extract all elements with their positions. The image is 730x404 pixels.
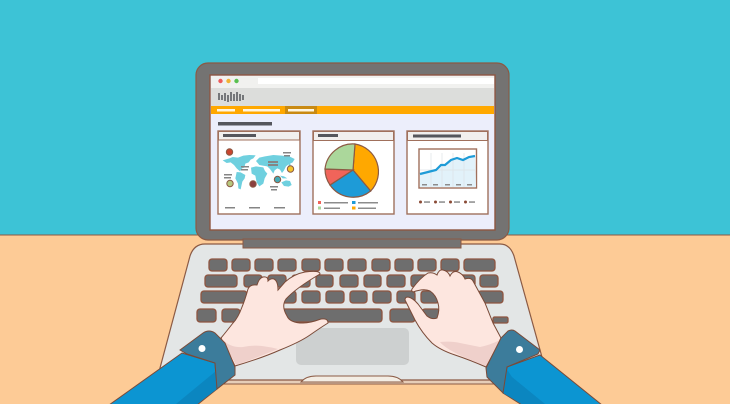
front notch [301, 376, 403, 382]
key row 3 [201, 291, 503, 303]
toolbar [211, 88, 494, 106]
left cuff button [198, 345, 206, 352]
hinge [243, 239, 461, 248]
nav item 1 [217, 109, 235, 112]
base deck [160, 244, 545, 380]
right wrist shadow [440, 340, 500, 366]
world map continents [223, 155, 295, 189]
window dots [218, 79, 239, 83]
right cuff [486, 330, 540, 393]
toolbar logo bars [218, 92, 244, 102]
dashboard title [218, 122, 272, 126]
right sleeve [503, 355, 602, 404]
left sleeve shade [176, 371, 217, 404]
chart area fill [420, 156, 476, 187]
line chart legend [419, 200, 475, 204]
orange nav bar [211, 106, 494, 114]
trend line [420, 156, 475, 174]
left sleeve [109, 353, 217, 404]
background: teal wall [0, 0, 730, 235]
left wrist shadow [222, 339, 278, 365]
screen [210, 75, 495, 230]
axis ticks [422, 184, 472, 186]
panel: line chart [407, 131, 488, 214]
right hand [405, 270, 501, 367]
key row 4 with spacebar [197, 309, 508, 323]
panel: pie chart [313, 131, 394, 214]
pie chart [325, 144, 378, 197]
right cuff button [516, 346, 523, 353]
left hand [221, 271, 328, 366]
laptop lid [196, 63, 509, 248]
map markers [226, 149, 294, 187]
right arm and hand [405, 270, 602, 404]
nav item 2 [243, 109, 280, 112]
line chart [419, 149, 476, 188]
browser tab bar [211, 76, 494, 88]
active nav tab [285, 106, 317, 114]
line panel header [408, 132, 488, 140]
laptop base [160, 244, 545, 384]
left arm and hand [109, 271, 328, 404]
base underside strip [162, 374, 543, 384]
left cuff [180, 331, 235, 389]
address bar [258, 78, 494, 84]
pie legend [318, 201, 378, 210]
lid frame [196, 63, 509, 240]
pie panel header [314, 132, 394, 140]
key row 2 [205, 275, 498, 287]
keyboard [197, 259, 508, 323]
key row 1 [209, 259, 495, 271]
background: peach desk [0, 235, 730, 404]
map panel header [218, 132, 300, 140]
right sleeve shade [503, 368, 545, 404]
trackpad [296, 328, 409, 365]
map labels [224, 152, 291, 208]
panel: world map [218, 131, 300, 214]
